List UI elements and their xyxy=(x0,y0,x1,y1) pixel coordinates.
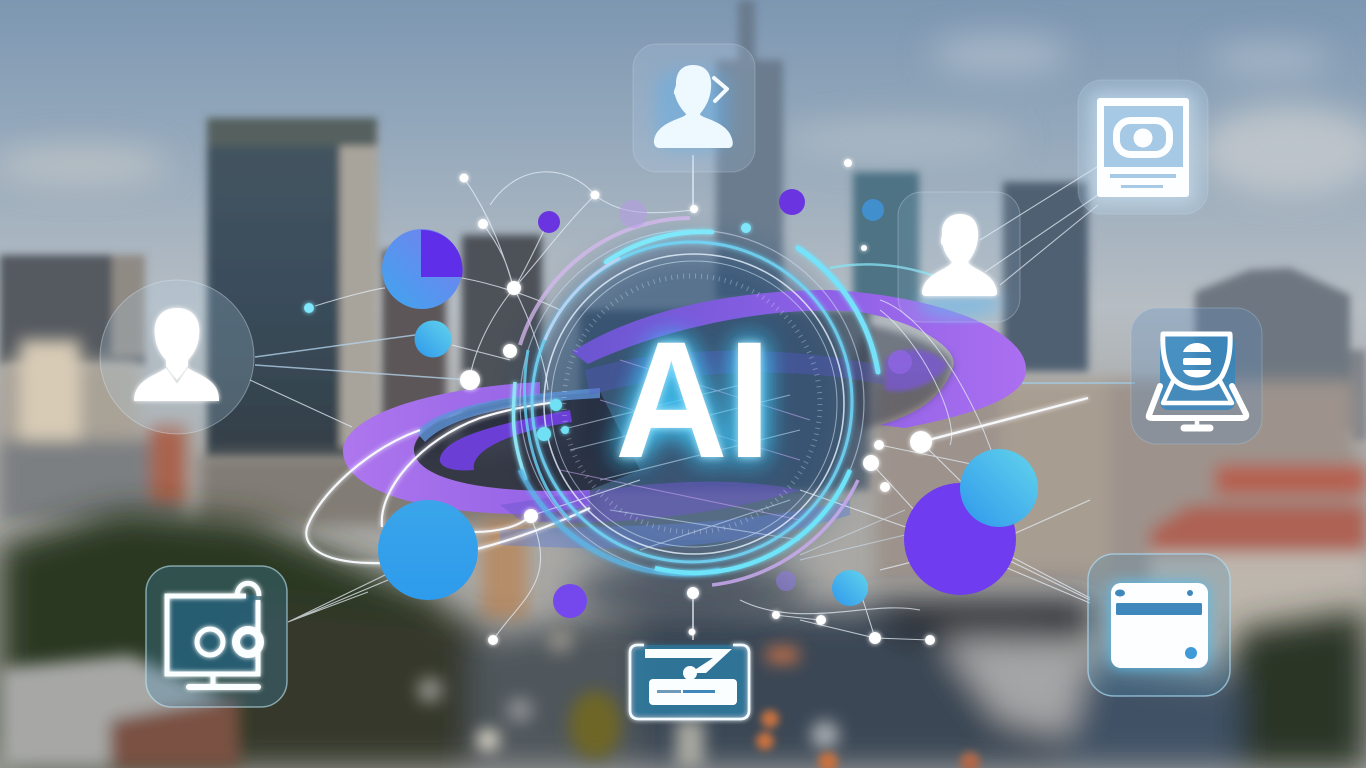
sphere: lower right blue xyxy=(960,449,1038,527)
icon card: keyboard with stylus xyxy=(630,645,749,719)
icon card: person with headset xyxy=(633,44,755,172)
sphere: bottom blue xyxy=(832,570,868,606)
sphere: small blue upper left xyxy=(414,320,452,358)
sphere: pie chart xyxy=(382,229,463,309)
purple orbit rings xyxy=(343,290,1026,548)
icon card: document with eye xyxy=(1078,80,1208,214)
sphere: faded blue top right xyxy=(862,199,884,221)
icon card: browser window xyxy=(1088,554,1230,696)
icon card: monitor shield xyxy=(1131,308,1262,444)
sphere: lower right purple xyxy=(904,483,1016,595)
ring right hollow xyxy=(853,325,953,430)
sphere: faded purple bottom xyxy=(776,571,796,591)
central dark haze xyxy=(525,245,855,618)
connector lines xyxy=(250,155,1135,640)
network nodes xyxy=(304,159,935,645)
icon card: person left xyxy=(100,280,254,434)
icon card: monitor with circles xyxy=(146,566,287,707)
floating spheres xyxy=(378,189,1038,618)
AI title: AI xyxy=(615,308,771,493)
central glowing rings xyxy=(513,218,878,585)
sphere: top purple right xyxy=(779,189,805,215)
sphere: lower left blue xyxy=(378,500,478,600)
white orbit swoosh xyxy=(306,398,1088,563)
sphere: top purple left xyxy=(538,211,560,233)
sphere: bottom purple xyxy=(553,584,587,618)
icon card: person right xyxy=(898,192,1020,322)
ring right xyxy=(572,290,1026,428)
sphere: pale violet top xyxy=(619,200,647,228)
sphere: faded purple xyxy=(888,350,912,374)
ring left hollow xyxy=(414,392,640,491)
ring left xyxy=(343,382,590,514)
